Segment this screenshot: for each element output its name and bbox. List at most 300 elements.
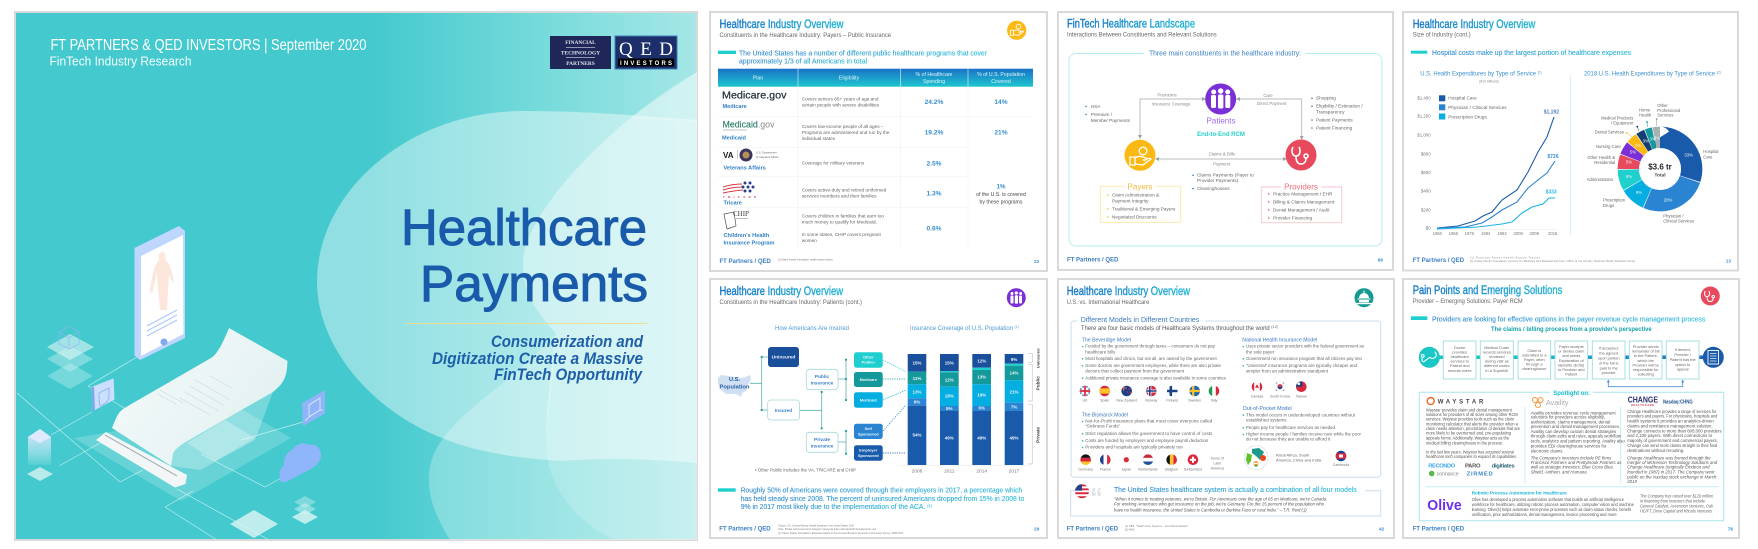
heading: Provider – Emerging Solutions: Payer RCM <box>1413 299 1523 305</box>
heading: Constituents in the Healthcare Industry: Patients (cont.) <box>720 300 862 306</box>
stacked bar chart: 5% <box>946 406 953 411</box>
flags: National Health Insurance countries: Taiwan <box>1296 394 1307 398</box>
stacked bar chart: (1) <box>1015 325 1019 329</box>
claims process flow: different codes <box>1484 363 1510 368</box>
model: National Health Insurance: simpler from an administrative standpoint <box>1246 369 1329 374</box>
providers node <box>1261 140 1342 223</box>
spotlight: Availity: Shield, Anthem, and Humana <box>1531 469 1587 474</box>
row: CHIP: women <box>802 238 817 243</box>
spotlight: Availity: through claim edits and rules, appeals workflow <box>1531 434 1622 439</box>
heading <box>1413 285 1562 305</box>
spotlight: Change Healthcare: providers and payers. For physicians, hospitals and <box>1627 414 1718 419</box>
line chart: 2008 <box>1530 231 1540 236</box>
flags: Bismarck countries: Latin <box>1213 461 1221 465</box>
stacked bar chart: Uninsured <box>1036 348 1040 368</box>
flags: Beveridge countries: UK <box>1082 399 1088 403</box>
row: CHIP: CHIP <box>733 210 749 218</box>
footer: (1) PBS: "Health Care Systems – Four Basic Models" <box>1125 525 1188 528</box>
providers node: Provider Financing <box>1273 215 1312 220</box>
quote box: have no health insurance, the United States is Cambodia or Burkina Faso or rural India.” – T.R. Reid (1) <box>1114 507 1307 512</box>
world markets icon: Rural Africa, South <box>1276 453 1309 458</box>
model: National Health Insurance: National Health Insurance Model <box>1242 338 1317 344</box>
footer: Note: Private and Government Category represents those who had both throughout the year <box>778 528 877 531</box>
patients node: Patients <box>1207 117 1235 126</box>
line chart: $1,192 <box>1544 110 1559 116</box>
stacked bar chart: 2011 <box>944 468 955 474</box>
claims process flow: Payer, often <box>1524 357 1545 362</box>
spotlight: Waystar: healthcare tech companies to expand its capabilities. <box>1426 454 1517 459</box>
donut chart: 2018 U.S. Health Expenditures by Type of Service <box>1584 70 1724 77</box>
spotlight: Availity: The Company's investors include PE firms <box>1531 456 1612 460</box>
insurance tree: Self <box>865 426 873 431</box>
patients node: End-to-End RCM <box>1197 132 1245 138</box>
row: CHIP: Children's Health <box>724 233 770 239</box>
claims process flow <box>1419 341 1724 387</box>
table: Plan <box>753 76 763 82</box>
model: Beveridge: doctors that collect payment from the government <box>1085 369 1185 374</box>
heading <box>1067 286 1191 306</box>
line chart: 1968 <box>1449 231 1459 236</box>
payers node: Payers <box>1128 182 1152 192</box>
icon: US flag <box>1075 484 1089 498</box>
claims process flow: rendered <box>1489 354 1505 359</box>
donut chart: Other Health & <box>1587 155 1615 160</box>
insurance tree: Private <box>814 437 830 443</box>
insurance tree: Insured <box>775 408 792 414</box>
model: Bismarck: Providers and hospitals are typically privately run <box>1085 445 1183 450</box>
line chart: (1) <box>1538 71 1542 75</box>
stacked bar chart: 6% <box>914 400 920 405</box>
series <box>1437 117 1555 229</box>
models heading: (1,2) <box>1271 325 1279 329</box>
cloud icon <box>280 443 321 482</box>
footer <box>719 525 1040 535</box>
stacked bar chart: 54% <box>912 433 922 438</box>
row: Veterans Affairs: Coverage for military veterans <box>802 160 865 166</box>
landscape frame <box>1069 54 1382 246</box>
spotlight: Change Healthcare: and 2,100 payers. With direct connections to <box>1627 433 1713 438</box>
claims process flow: Claim is <box>1527 348 1541 353</box>
flow labels: Payment <box>1213 161 1231 166</box>
donut chart: Services <box>1657 112 1673 117</box>
patient solutions list: Transparency <box>1316 109 1345 114</box>
line chart: $1,400 <box>1417 96 1431 100</box>
callout <box>1411 315 1706 333</box>
donut chart: 4% <box>1635 143 1641 148</box>
donut chart: Prescription <box>1603 198 1626 203</box>
claims solutions list: Provider Payments) <box>1197 178 1239 183</box>
flags: Bismarck countries: Some of <box>1211 457 1224 461</box>
donut chart: Clinical Services <box>1663 218 1694 223</box>
spotlight: Change Healthcare: Change Healthcare (originally Emdeon and <box>1627 465 1710 470</box>
stacked bar chart: 7% <box>1011 405 1017 410</box>
donut chart: $3.6 tr <box>1648 162 1672 171</box>
donut chart: Professional <box>1657 108 1680 113</box>
spotlight: Change Healthcare: Nasdaq:CHNG <box>1663 399 1693 405</box>
spotlight: Availity: provides EDI clearinghouse services for <box>1531 443 1607 448</box>
model: Out-of-Pocket: This model occurs in underdeveloped countries without <box>1246 412 1356 417</box>
flow labels: Claims & Bills <box>1209 151 1235 156</box>
flags: Bismarck countries: Germany <box>1078 467 1093 471</box>
flags: Bismarck countries: Switzerland <box>1184 467 1202 471</box>
flow labels <box>1152 93 1287 166</box>
claims process flow: which the <box>1637 358 1654 363</box>
line chart: $600 <box>1421 170 1431 175</box>
panel: international healthcare slide <box>1058 279 1394 538</box>
claims process flow: remainder of bill <box>1632 349 1660 354</box>
process boxes <box>1443 341 1699 379</box>
line chart: $1,200 <box>1417 114 1431 118</box>
heading: Constituents in the Healthcare Industry: Payers – Public Insurance <box>720 33 892 39</box>
claims solutions list <box>1192 173 1254 191</box>
donut chart: Drugs <box>1603 203 1614 208</box>
claims solutions list: Claims Payments (Payer to <box>1197 173 1254 178</box>
row: Medicaid: individual states <box>802 136 836 141</box>
model: Bismarck: “Sickness Funds” <box>1085 424 1121 429</box>
model: Out-of-Pocket: People pay for healthcare services as needed <box>1246 425 1335 430</box>
stacked bar chart: 2008 <box>912 468 923 474</box>
callout: Providers are looking for effective options in the payer revenue cycle management process <box>1432 315 1706 324</box>
model: Beveridge: Most hospitals and clinics, but not all, are owned by the government <box>1085 356 1217 361</box>
spotlight: Olive <box>1427 491 1714 517</box>
stacked bar chart: 2017 <box>1009 468 1020 474</box>
heading: U.S. vs. International Healthcare <box>1067 300 1150 306</box>
line chart: U.S. Health Expenditures by Type of Service <box>1420 71 1544 78</box>
row: Medicare: 14% <box>994 99 1008 106</box>
table: Covered <box>991 79 1011 85</box>
cover subtitle: Digitization Create a Massive <box>432 350 643 368</box>
spotlight: Olive: workforce for healthcare, utilizing robotic process automation, computer vision and machine <box>1472 502 1635 507</box>
icon: payer hand <box>1007 21 1026 40</box>
panel: public insurance table slide <box>710 12 1047 271</box>
footer <box>1413 526 1733 532</box>
server block <box>28 429 51 465</box>
donut chart: Dental Services <box>1595 129 1624 134</box>
row: CHIP: 0.6% <box>926 226 942 232</box>
heading <box>1413 19 1536 39</box>
line chart: ($ in billions) <box>1479 79 1499 83</box>
cover subtitle <box>432 333 644 384</box>
icon: document end <box>1703 347 1724 368</box>
flow labels: Direct Payment <box>1257 101 1287 106</box>
table: Spending <box>923 79 945 85</box>
row: Medicare: certain people with severe disabilities <box>802 102 880 108</box>
stacked bar chart: 49% <box>977 436 986 441</box>
line chart: $400 <box>1421 188 1431 194</box>
panel: how Americans are insured slide <box>710 279 1047 538</box>
spotlight frame: Spotlight on: <box>1553 390 1590 397</box>
spotlight: Olive: HC/FT, Drive Capital and Khosla Ventures <box>1640 509 1713 514</box>
quote box <box>1071 482 1381 516</box>
model: National Health Insurance <box>1242 338 1365 374</box>
cover illustration <box>17 226 325 540</box>
insurance tree: Public• <box>862 360 876 364</box>
spotlight: Change Healthcare: Change can send most claims straight to their final <box>1627 443 1717 448</box>
stacked bar chart: 21% <box>1009 390 1019 395</box>
heading <box>720 19 892 39</box>
cover title: Healthcare <box>401 199 647 256</box>
payer solutions list top left: Premium / <box>1091 112 1113 117</box>
claims process flow: Provider / <box>1674 352 1692 357</box>
flow labels: Premiums <box>1157 93 1177 98</box>
model: National Health Insurance: the sole payer <box>1246 349 1275 354</box>
spotlight: Waystar <box>1426 398 1521 478</box>
row: Tricare: Covers active-duty and retired uniformed <box>802 188 887 192</box>
model: National Health Insurance: “Universal” insurance programs are typically cheaper and <box>1246 363 1357 368</box>
flags: Bismarck countries: America <box>1211 466 1224 470</box>
row: Medicare: Medicare.gov <box>722 90 787 102</box>
providers node: Billing & Claims Management <box>1273 199 1335 204</box>
heading: Healthcare Industry Overview <box>1413 19 1536 31</box>
spotlight: Olive: Olive <box>1427 498 1462 514</box>
donut chart: 5% <box>1626 160 1632 164</box>
claims process flow: Provider will be <box>1633 362 1659 367</box>
insurance tree: Medicaid <box>860 398 877 402</box>
icon: stethoscope red <box>1701 286 1720 306</box>
spotlight: Change Healthcare: Change connects to more than 800,000 providers <box>1627 428 1722 433</box>
spotlight: Change Healthcare: 2019 <box>1626 479 1637 484</box>
world markets icon <box>1244 446 1349 470</box>
insurance tree <box>718 325 906 473</box>
spotlight: Change Healthcare: health systems it provides an analytics-driven <box>1627 418 1714 423</box>
footer: FT Partners / QED <box>1413 258 1465 264</box>
stacked bar chart: 12% <box>977 359 986 364</box>
claims process flow: of the bill is <box>1599 360 1618 366</box>
small diamonds bottom <box>230 496 318 538</box>
donut chart: 3% <box>1654 136 1660 140</box>
claims process flow: records services <box>1483 350 1511 354</box>
stacked bar chart <box>898 325 1042 474</box>
line chart: $800 <box>1421 152 1431 156</box>
row: Medicaid: 19.2% <box>925 130 943 136</box>
claims solutions list: Clearinghouses <box>1197 186 1230 191</box>
heading: Size of Industry (cont.) <box>1413 33 1471 39</box>
donut chart: (2) <box>1717 70 1721 74</box>
claims process flow: provides <box>1452 350 1467 354</box>
insurance tree: Medicare <box>860 377 878 382</box>
heading: FinTech Healthcare Landscape <box>1067 19 1195 31</box>
claims process flow: Provider sends <box>1633 344 1659 349</box>
logo: QED Investors <box>615 36 677 69</box>
quote box: The United States healthcare system is actually a combination of all four models <box>1114 485 1357 494</box>
spotlight: Waystar: In the last few years, Waystar has acquired several <box>1426 450 1515 454</box>
heading: Interactions Between Constituents and Relevant Solutions <box>1067 33 1217 39</box>
icon: provider start <box>1419 347 1440 368</box>
flags: Beveridge countries: Sweden <box>1188 399 1201 403</box>
spotlight: Olive: Olive has developed a process automation software that builds an artificial intelligence <box>1472 497 1625 502</box>
claims process flow: paid to the <box>1600 366 1618 370</box>
spotlight: Change Healthcare: Change Healthcare was formed through the <box>1627 456 1711 460</box>
row: CHIP <box>724 210 942 247</box>
footer: (1) Peterson-Kaiser Health System Tracker <box>1470 256 1540 260</box>
merged coverage cell: of the U.S. is covered <box>976 192 1026 198</box>
spotlight: Availity: tools, analytics and pattern reporting. Availity also <box>1531 438 1625 443</box>
donut chart: 8% <box>1626 174 1632 179</box>
footer: 76 <box>1728 526 1733 532</box>
donut chart: Care <box>1703 154 1713 159</box>
insurance tree: Sponsored <box>858 432 879 436</box>
footer: (2) Kaiser Family Foundation: Centers for Medicare and Medicaid Services, Office of the Actuary, National Health Statistics Group <box>1470 260 1636 263</box>
bar 2014 <box>972 354 991 465</box>
donut chart: 3% <box>1643 138 1649 144</box>
spotlight: Olive: General Catalyst, Ascension Ventures, Oak <box>1640 504 1714 509</box>
spotlight: Waystar: more likely to be overturned and, pre-populating <box>1426 431 1512 436</box>
footer <box>1067 258 1383 264</box>
claims process flow: If denied, <box>1675 347 1691 352</box>
spotlight: Waystar: claim needs attention, prioritization of denials that are <box>1426 426 1521 431</box>
phone <box>134 226 185 360</box>
logo: QED Investors: INVESTORS <box>620 61 672 67</box>
stacked bar chart: 9% <box>1011 357 1017 362</box>
claims process flow: If accepted, <box>1599 346 1619 350</box>
logo: QED Investors: QED <box>619 39 673 60</box>
spotlight: Availity: solutions for providers across eligibility, <box>1531 415 1605 420</box>
patient solutions list: Patient Payments <box>1316 117 1353 122</box>
insurance tree: Insurance <box>811 380 834 386</box>
donut chart <box>1584 70 1721 223</box>
callout: approximately 1/3 of all Americans in total <box>739 56 867 66</box>
donut chart: Physician / <box>1663 213 1684 218</box>
row: Medicaid: Medicaid <box>722 136 747 142</box>
stacked bar chart: Public <box>1036 376 1042 391</box>
cover subtitle: Consumerization and <box>491 333 644 351</box>
quote box: For working Americans who get insurance on the job, we're Germany. For the 15 percent of the population who <box>1114 502 1325 507</box>
heading: Healthcare Industry Overview <box>720 286 844 298</box>
spotlight: Availity: electronic claims. <box>1531 448 1564 453</box>
payer solutions list top left: Member Payments <box>1091 118 1131 123</box>
model: National Health Insurance: Government run insurance program that all citizens pay into <box>1246 356 1362 361</box>
quote box: “When it comes to treating veterans, we're Britain. For Americans over the age of 65 on Medicare, we're Canada. <box>1114 497 1327 502</box>
heading: Healthcare Industry Overview <box>1067 286 1191 298</box>
claims process flow: to Provider and <box>1558 367 1584 372</box>
flow labels: Insurance Coverage <box>1152 101 1191 106</box>
insurance tree: Other <box>863 354 874 360</box>
donut chart: 9% <box>1636 190 1642 195</box>
spotlight: Availity: prevention and denial management processes. <box>1531 424 1620 429</box>
providers node: Denial Management / Audit <box>1273 207 1330 212</box>
claims process flow: Patient has the <box>1670 357 1696 362</box>
claims process flow: in a Superbill <box>1486 368 1508 373</box>
row: Medicare <box>722 90 1008 110</box>
model: Beveridge: The Beveridge Model <box>1082 338 1131 344</box>
stacked bar chart: 13% <box>977 375 986 380</box>
callout: The claims / billing process from a provider's perspective <box>1491 326 1652 333</box>
line chart: 1984 <box>1481 231 1491 236</box>
row: Tricare <box>723 182 942 206</box>
claims process flow: during visit as <box>1485 358 1509 364</box>
stacked bar chart: 15% <box>945 360 954 365</box>
footer <box>720 258 1040 265</box>
donut chart: Health <box>1639 112 1652 117</box>
payers node: Negotiated Discounts <box>1112 214 1157 219</box>
insurance tree: Uninsured <box>772 354 795 360</box>
line chart: $200 <box>1421 208 1431 212</box>
footer: 89 <box>1378 258 1383 264</box>
spotlight: Availity <box>1531 398 1625 474</box>
row: CHIP: Covers children in families that earn too <box>802 214 884 218</box>
row: Veterans Affairs: 2.5% <box>926 160 942 168</box>
line chart: 1960 <box>1433 231 1443 236</box>
claims process flow: submitted to a <box>1522 352 1547 358</box>
claims process flow: provider <box>1602 370 1616 375</box>
claims process flow: records notes <box>1448 368 1472 373</box>
heading: Pain Points and Emerging Solutions <box>1413 285 1562 297</box>
model: Out-of-Pocket: Higher income people / families receive care while the poor <box>1246 432 1361 437</box>
donut chart: 3% <box>1650 136 1656 142</box>
spotlight: Waystar: medical billing clearinghouse in the process. <box>1426 440 1503 446</box>
footer: 42 <box>1379 527 1385 533</box>
line chart: $1,000 <box>1417 132 1431 138</box>
logo: Financial Technology Partners: TECHNOLOGY <box>561 50 600 56</box>
world markets icon: America, China and India <box>1276 458 1322 463</box>
merged coverage cell: by these programs <box>980 200 1023 206</box>
row: CHIP: much money to qualify for Medicaid; <box>802 220 877 224</box>
spotlight: Waystar: RECONDO <box>1428 464 1456 470</box>
icon: patients <box>1007 288 1026 307</box>
merged coverage cell <box>976 184 1026 206</box>
claims process flow: collecting <box>1638 372 1654 377</box>
donut chart: Administration <box>1587 177 1614 182</box>
spotlight: Olive: in financing from investors that include <box>1640 499 1706 504</box>
claims process flow: Patient and <box>1450 363 1470 368</box>
footer: (2) WHO <box>1125 528 1135 532</box>
model: Bismarck <box>1082 412 1213 450</box>
table: % of U.S. Population <box>977 72 1025 78</box>
model: Bismarck: The Bismarck Model <box>1082 412 1128 418</box>
spotlight: Waystar: monitoring calculator that alerts the provider when a <box>1426 421 1519 426</box>
stacked bar chart: 14% <box>1009 371 1019 376</box>
model: Bismarck: Costs are funded by employers and employee payroll deduction <box>1085 438 1209 443</box>
row: CHIP: Insurance Program <box>724 241 775 247</box>
row: Medicaid: Covers low-income people of all ages – <box>802 124 884 129</box>
spotlight: Change Healthcare: HEALTHCARE <box>1631 403 1654 407</box>
stacked bar chart: 11% <box>913 376 921 381</box>
flags: Beveridge countries: Norway <box>1145 399 1158 403</box>
laptop icon <box>302 390 325 426</box>
callout: The United States has a number of different public healthcare programs that cover <box>739 48 988 58</box>
spotlight: Olive: The Company has raised over $120 million <box>1640 494 1714 499</box>
callout: Hospital costs make up the largest portion of healthcare expenses <box>1432 48 1631 57</box>
spotlight: Change Healthcare: Change Healthcare provides a range of services for <box>1627 409 1717 414</box>
heading <box>720 286 862 306</box>
payers node: Traditional & Emerging Payers <box>1112 206 1176 211</box>
flags: Bismarck countries: France <box>1100 467 1111 471</box>
heading: Healthcare Industry Overview <box>720 19 844 31</box>
footer: 29 <box>1034 527 1040 533</box>
flags: Beveridge countries: Italy <box>1211 399 1217 403</box>
model: Beveridge: Additional private insurance coverage is also available in some countries <box>1085 375 1227 380</box>
US population <box>718 375 751 397</box>
line chart: 2018 <box>1548 231 1558 236</box>
cover header text: FT PARTNERS & QED INVESTORS | September 2020 <box>50 37 367 54</box>
line chart: $333 <box>1546 190 1557 196</box>
insurance tree: • Other Public includes the VA, TRICARE and CHIP <box>755 468 856 473</box>
footer: Source: U.S. Census Bureau, Health Insurance in the United States: 2017 <box>778 525 855 528</box>
callout: (1) <box>927 504 932 508</box>
spotlight frame <box>1419 390 1724 521</box>
line chart: 2000 <box>1514 231 1524 236</box>
row: Medicare: Covers seniors 65+ years of age and <box>802 96 879 102</box>
spotlight: Waystar: Waystar provides claim and denial management <box>1426 408 1513 412</box>
table: % of Healthcare <box>916 72 953 78</box>
base pad <box>74 410 291 501</box>
flags: Beveridge countries: Spain <box>1100 399 1109 403</box>
donut chart: Nursing Care <box>1596 144 1621 149</box>
donut chart: 33% <box>1684 152 1693 158</box>
row: Veterans Affairs: U.S. Department <box>756 150 777 154</box>
spotlight: Change Healthcare: majority of government and commercial payers, <box>1627 438 1718 443</box>
model: Out-of-Pocket: Out-of-Pocket Model <box>1243 406 1292 412</box>
